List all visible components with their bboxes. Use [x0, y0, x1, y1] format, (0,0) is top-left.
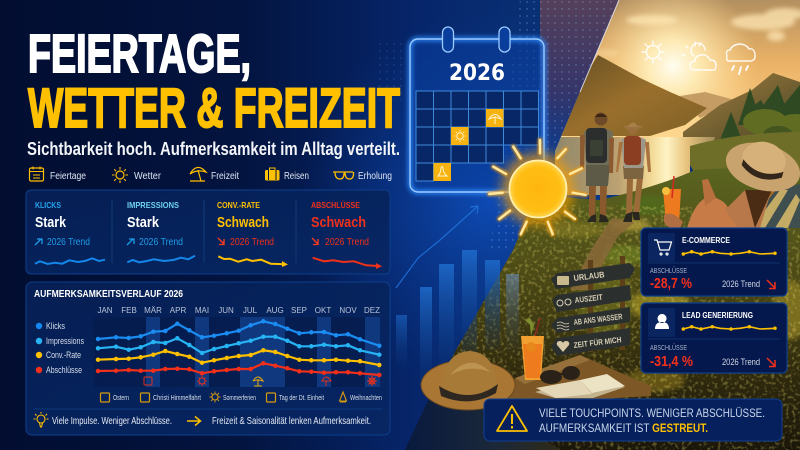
holiday legend	[100, 392, 382, 402]
holiday: Sommerferien: Sommerferien	[223, 393, 256, 402]
cocktail on table	[521, 318, 544, 380]
card: Lead Generierung: ABSCHLÜSSE	[650, 344, 687, 352]
callout: warning message: AUFMERKSAMKEIT IST GESTREUT.	[539, 421, 708, 435]
highlighted holiday: bell	[434, 163, 451, 181]
theme: Erholung: Erholung	[358, 171, 392, 182]
card: Lead Generierung: LEAD GENERIERUNG	[682, 311, 753, 320]
diagonal white edge line	[580, 0, 619, 92]
line: Impressions	[98, 337, 379, 355]
line: Klicks	[98, 321, 379, 346]
theme: Feiertage	[30, 166, 86, 182]
icon: partly cloudy	[682, 42, 716, 70]
icon: sun	[642, 41, 664, 63]
main title	[28, 24, 400, 139]
KPI: Conv.-Rate	[217, 200, 288, 267]
main title: FEIERTAGE,	[28, 24, 251, 84]
card: E-Commerce: -28,7 %	[650, 276, 692, 292]
theme: Freizeit: Freizeit	[211, 171, 239, 182]
card: E-Commerce: ABSCHLÜSSE	[650, 267, 687, 275]
KPI: Conv.-Rate: 2026 Trend	[230, 237, 274, 248]
sun glow	[600, 0, 747, 130]
holiday: Tag der Dt. Einheit: Tag der Dt. Einheit	[279, 393, 325, 402]
calendar	[410, 27, 544, 192]
KPI: Abschlüsse: ABSCHLÜSSE	[311, 200, 360, 210]
grass highlights	[545, 195, 800, 392]
KPI: Impressions: 2026 Trend	[139, 237, 183, 248]
KPI: Abschlüsse: Schwach	[311, 214, 366, 231]
KPI: Abschlüsse	[311, 200, 382, 269]
bench dark foreground	[405, 400, 560, 450]
signpost boards	[551, 263, 635, 356]
open book	[535, 374, 625, 398]
icon: warning triangle	[497, 406, 527, 431]
KPI: Klicks	[35, 200, 105, 264]
KPI: Klicks: 2026 Trend	[47, 237, 90, 248]
card: Lead Generierung: 2026 Trend	[722, 357, 760, 367]
KPI: Impressions: Stark	[127, 214, 160, 231]
month labels: APR	[170, 306, 186, 315]
event markers in chart	[144, 376, 377, 386]
month labels: MÄR	[144, 306, 162, 315]
line: Abschlüsse	[98, 363, 379, 375]
highlighted month bands	[94, 317, 380, 387]
month labels	[97, 306, 380, 315]
theme: Erholung	[333, 171, 392, 182]
panel: attention timeline chart	[26, 282, 390, 435]
month labels: SEP	[291, 306, 307, 315]
chart heading: AUFMERKSAMKEITSVERLAUF 2026	[34, 288, 183, 300]
far mountain	[680, 92, 735, 118]
legend	[36, 321, 84, 376]
callout: warning message	[484, 399, 782, 441]
big glowing sun	[489, 140, 586, 234]
KPI: Klicks: Stark	[35, 214, 67, 231]
theme: Reisen	[265, 168, 309, 182]
theme: Feiertage: Feiertage	[50, 171, 86, 182]
calendar year: 2026	[449, 61, 505, 86]
sky	[560, 0, 800, 140]
icon: shopping cart	[654, 240, 672, 255]
holiday: Weihnachten	[340, 392, 382, 402]
trees	[720, 85, 800, 140]
month labels: DEZ	[364, 306, 380, 315]
legend: Impressions	[46, 336, 84, 347]
legend: Abschlüsse	[46, 365, 82, 376]
takeaway strip: Viele Impulse. Weniger Abschlüsse.	[52, 415, 172, 427]
hiker 1	[580, 112, 614, 222]
table surface	[508, 355, 651, 398]
left mountain	[561, 55, 707, 136]
sign: Zeit für mich: ZEIT FÜR MICH	[573, 335, 622, 350]
KPI: Impressions: IMPRESSIONS	[127, 200, 179, 210]
holiday: Weihnachten: Weihnachten	[350, 393, 382, 402]
highlighted holiday: sun	[451, 127, 468, 145]
clouds	[591, 8, 800, 57]
straw hat on table	[421, 351, 515, 410]
calendar grid	[416, 91, 538, 181]
main title: WETTER & FREIZEIT	[28, 76, 400, 139]
legend: Klicks	[46, 321, 65, 332]
grass speckle	[452, 205, 800, 450]
blue bars chart decor	[396, 250, 519, 397]
panel: KPI overview	[26, 190, 390, 274]
sign: Auszeit: AUSZEIT	[574, 293, 603, 305]
KPI: Abschlüsse: 2026 Trend	[325, 237, 369, 248]
woman in deck chair	[687, 132, 800, 228]
theme: Wetter: Wetter	[134, 171, 162, 182]
photo: summer lake landscape	[400, 0, 800, 450]
KPI: Klicks: KLICKS	[35, 200, 61, 210]
card: E-Commerce	[641, 228, 787, 296]
holiday: Tag der Dt. Einheit	[266, 393, 325, 402]
subtitle: Sichtbarkeit hoch. Aufmerksamkeit im Alltag verteilt.	[27, 139, 400, 159]
sunglasses	[540, 366, 580, 384]
wooden sign posts	[588, 256, 625, 352]
weather icons	[642, 41, 755, 74]
holiday: Christi Himmelfahrt: Christi Himmelfahrt	[153, 393, 202, 402]
icon: rain cloud	[726, 44, 755, 74]
takeaway strip: Freizeit & Saisonalität lenken Aufmerksamkeit.	[212, 415, 371, 427]
lake	[555, 137, 715, 195]
holiday: Ostern	[100, 393, 129, 402]
holiday: Sommerferien	[210, 392, 256, 402]
takeaway strip	[34, 409, 382, 427]
icon: person	[655, 314, 669, 329]
icon: lightbulb	[34, 412, 48, 427]
card: E-Commerce: E-COMMERCE	[682, 236, 731, 245]
KPI: Conv.-Rate: Schwach	[217, 214, 269, 231]
card: Lead Generierung	[641, 303, 787, 373]
rising trend arrow	[396, 206, 478, 288]
path	[570, 218, 635, 290]
hiker 2	[616, 122, 651, 222]
month labels: JUN	[218, 306, 234, 315]
holiday: Christi Himmelfahrt	[140, 393, 202, 402]
month labels: OKT	[315, 306, 331, 315]
theme: Reisen: Reisen	[284, 171, 309, 182]
sign: Ab ans Wasser: AB ANS WASSER	[573, 312, 623, 327]
month labels: AUG	[266, 306, 284, 315]
arrow	[187, 416, 200, 426]
highlighted holiday: umbrella	[486, 109, 504, 127]
theme: Wetter	[112, 167, 162, 183]
legend: Conv.-Rate	[46, 350, 81, 361]
month labels: JUL	[243, 306, 258, 315]
cocktail near woman	[662, 176, 683, 228]
theme icon row	[30, 166, 392, 183]
far shore	[690, 132, 800, 172]
ground	[400, 168, 800, 450]
calendar rings	[442, 27, 510, 52]
month labels: MAI	[195, 306, 209, 315]
sign: Urlaub: URLAUB	[573, 269, 605, 283]
holiday: Ostern: Ostern	[113, 393, 129, 402]
month labels: NOV	[339, 306, 357, 315]
month labels: JAN	[97, 306, 113, 315]
card: E-Commerce: 2026 Trend	[722, 279, 760, 289]
theme: Freizeit	[190, 167, 239, 182]
KPI: Impressions	[127, 200, 195, 262]
right mountain	[683, 73, 800, 140]
month labels: FEB	[121, 306, 137, 315]
card: Lead Generierung: -31,4 %	[650, 354, 693, 370]
KPI: Conv.-Rate: CONV.-RATE	[217, 200, 260, 210]
line: Conv.-Rate	[98, 350, 379, 365]
